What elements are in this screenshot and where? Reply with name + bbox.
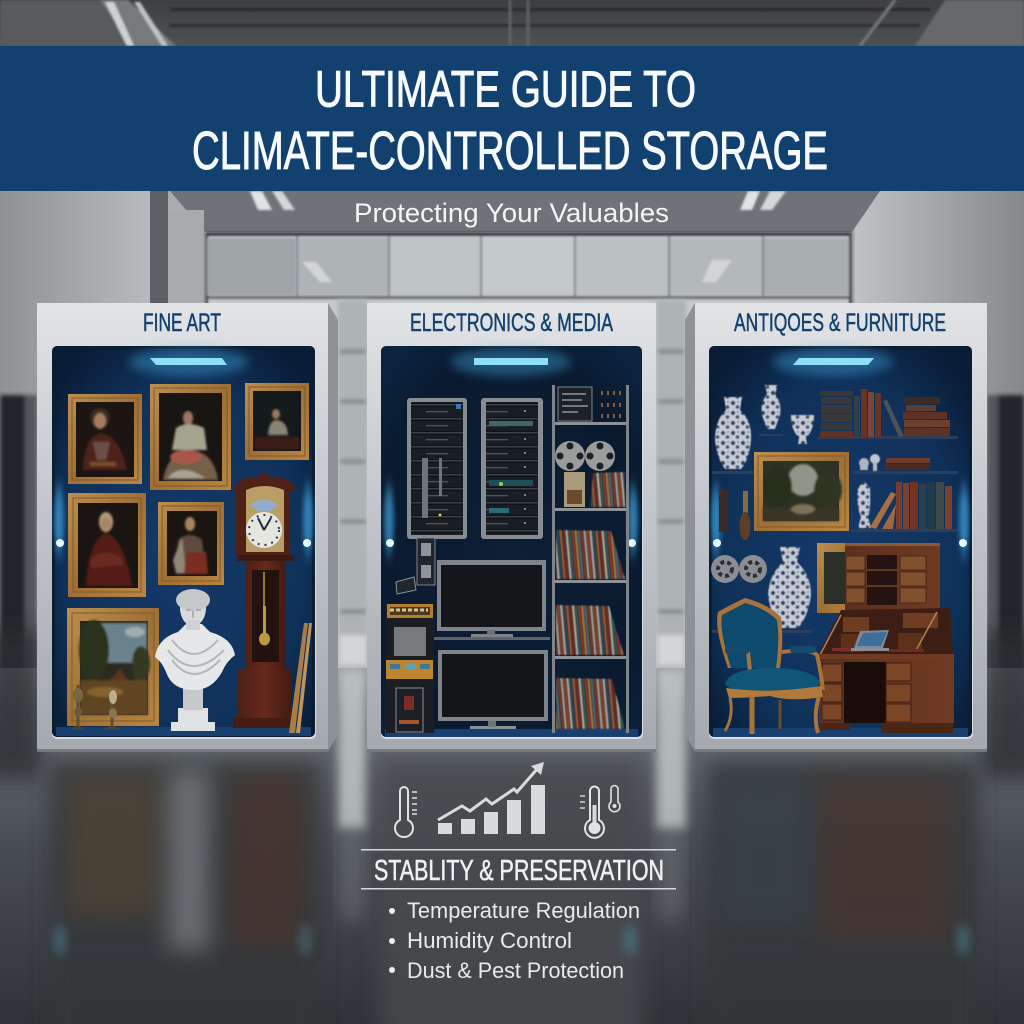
subtitle: Protecting Your Valuables: [354, 198, 669, 228]
heading: stability and preservation: STABLITY & PRESERVATION: [374, 855, 664, 887]
painting: portrait of a woman: [68, 394, 142, 484]
porcelain vases: [715, 385, 880, 628]
film strip: [396, 538, 435, 594]
media shelving unit: [552, 385, 629, 733]
device on top shelf: [558, 387, 623, 421]
heading: electronics and media: ELECTRONICS & MEDIA: [410, 309, 613, 337]
icon: rising bar chart: [438, 762, 545, 834]
heading: fine art: FINE ART: [143, 309, 221, 337]
bullet list: [389, 898, 640, 983]
sculpture: marble bust: [155, 589, 235, 731]
painting: landscape: [67, 608, 159, 726]
panel: fine art: [37, 303, 338, 752]
painting: small figure: [245, 383, 309, 460]
film reels: [711, 555, 767, 583]
leaning frame slats: [289, 623, 312, 733]
bullet list: Dust & Pest Protection: [407, 958, 624, 983]
monitor bottom: [438, 650, 548, 729]
record collections: [556, 472, 625, 729]
writing desk: [818, 608, 954, 733]
painting: landscape: [754, 452, 849, 531]
candlesticks: [71, 685, 121, 730]
wall shelves: [712, 434, 958, 633]
panel: antiques and furniture: [685, 303, 987, 752]
antique books: [820, 389, 952, 529]
title: [192, 60, 828, 181]
wood cabinet hutch: [845, 543, 940, 610]
painting: nobleman: [158, 502, 224, 585]
icon: thermometer: [395, 787, 417, 837]
light fixtures: [711, 348, 969, 554]
painting behind cabinet: [817, 543, 862, 613]
arcade cabinet: [386, 604, 434, 733]
light fixtures: [54, 348, 313, 554]
title banner: [0, 46, 1024, 191]
monitor top: [434, 560, 550, 640]
film reels: [555, 441, 615, 471]
painting: seated lady: [150, 384, 231, 490]
bullet list: Temperature Regulation: [407, 898, 640, 923]
panel: electronics and media: [367, 303, 656, 752]
grandfather clock: [233, 472, 297, 728]
wall ornaments: [719, 490, 750, 540]
floor reflections of cabinets: [50, 762, 978, 1024]
upholstered armchair: [717, 598, 823, 734]
bullet list: Humidity Control: [407, 928, 572, 953]
server rack left: [407, 398, 467, 539]
laptop: [832, 630, 924, 652]
title: ULTIMATE GUIDE TO: [315, 60, 696, 118]
light fixtures: [384, 348, 638, 554]
server rack right: [481, 398, 543, 539]
icon: thermometer with small gauge: [580, 786, 620, 838]
painting: woman in red: [68, 493, 146, 597]
media box: [564, 472, 585, 507]
